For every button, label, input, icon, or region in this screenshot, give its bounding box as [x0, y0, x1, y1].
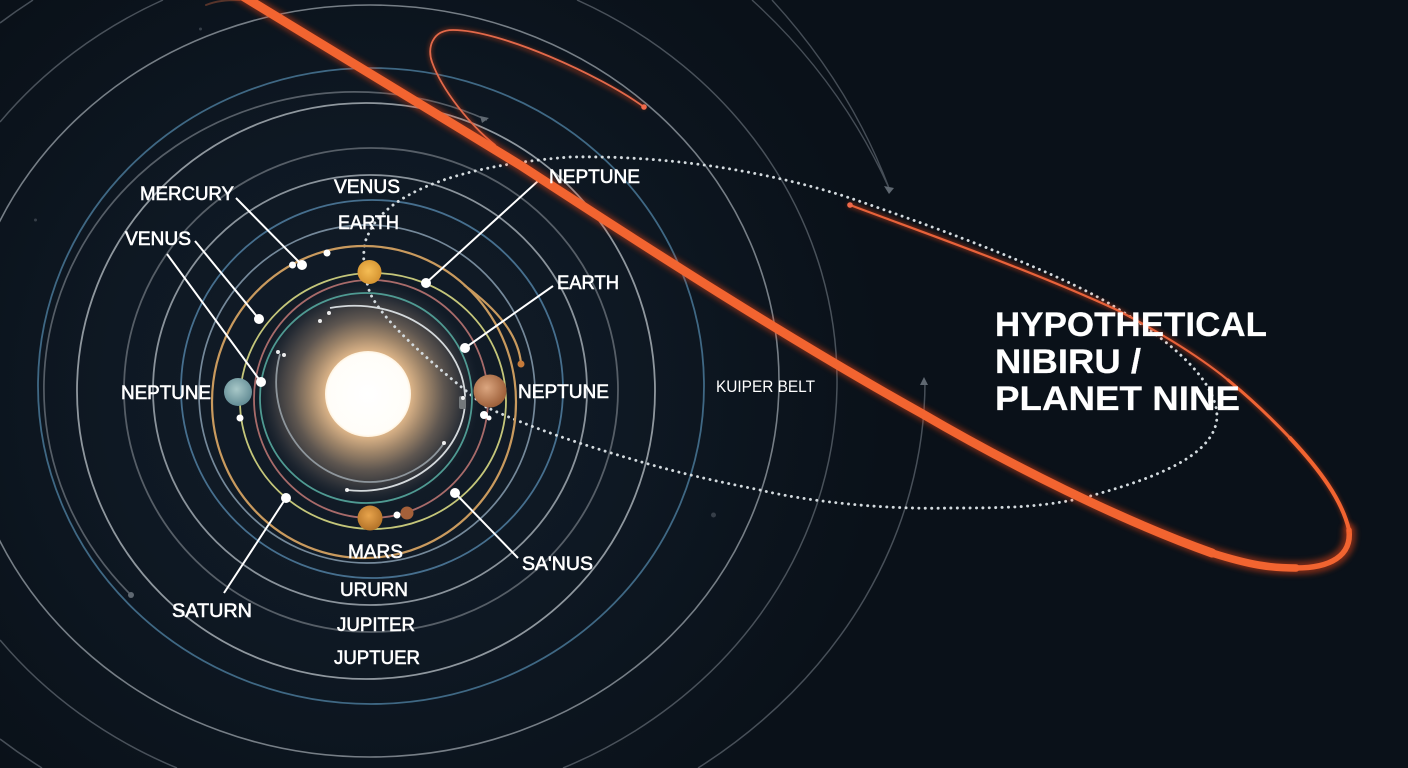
- planet: small orange: [518, 360, 524, 368]
- orange orbit: [212, 246, 521, 558]
- leader: saturn: [224, 498, 286, 593]
- yellow orbit: [240, 273, 506, 529]
- title line 2: NIBIRU /: [995, 343, 1142, 381]
- dotted orbit: [364, 157, 1217, 508]
- outer orbit rings: [0, 0, 925, 768]
- marker dots: [236, 250, 492, 519]
- nibiru orbit: [206, 0, 1349, 568]
- leader lines: [167, 181, 553, 593]
- arrowhead lower right: [920, 377, 928, 385]
- return segment glow: [850, 205, 1349, 530]
- small inner dots: [276, 311, 465, 492]
- small orbit line: [430, 30, 644, 145]
- leader: mercury: [236, 198, 302, 265]
- planets: [224, 260, 524, 530]
- ring 1: [199, 225, 535, 563]
- title line 1: HYPOTHETICAL: [995, 306, 1267, 344]
- label: earth right: EARTH: [557, 272, 619, 294]
- ring 6: [38, 68, 704, 704]
- return segment thin: [850, 205, 1228, 380]
- faint dots: [34, 28, 716, 518]
- faint tail at top edge: [206, 0, 240, 5]
- planet labels: [121, 166, 640, 669]
- label: saturn: SATURN: [172, 600, 252, 622]
- label: venus left: VENUS: [125, 228, 191, 250]
- grey marker: [459, 396, 466, 409]
- sun disc: [325, 351, 411, 437]
- thick segment: [236, 0, 1212, 553]
- label: jupiter: JUPITER: [337, 614, 415, 636]
- white inner arc: [330, 306, 465, 491]
- label: juptuer: JUPTUER: [334, 647, 420, 669]
- label: earth top: EARTH: [338, 212, 399, 234]
- red orbit: [254, 280, 488, 518]
- teal orbit: [260, 293, 472, 503]
- ring 2: [181, 200, 563, 578]
- label: kuiper belt: KUIPER BELT: [716, 377, 815, 396]
- leader: neptune: [426, 181, 538, 283]
- tapering segment near perihelion: [1212, 553, 1296, 568]
- leader: earth: [465, 286, 553, 348]
- small orbit end dot: [641, 104, 647, 110]
- small orbit glow: [430, 30, 644, 145]
- orbit glow: [236, 0, 1349, 568]
- ring 7: [0, 5, 779, 757]
- ring 5: [77, 103, 655, 679]
- upper right arc pair: [752, 0, 889, 188]
- sun: [256, 282, 480, 506]
- grey inner arc: [276, 354, 444, 482]
- return segment outer: [1290, 438, 1349, 530]
- planet: small brown: [400, 506, 414, 520]
- ring 8: [0, 0, 837, 768]
- return segment end dot: [847, 202, 853, 208]
- title line 3: PLANET NINE: [995, 380, 1240, 418]
- label: neptune left: NEPTUNE: [121, 382, 211, 404]
- leader: venus upper: [195, 241, 259, 319]
- title: [995, 306, 1267, 418]
- label: sanus: SA'NUS: [522, 553, 593, 575]
- ring 4: [124, 148, 618, 632]
- sun glow: [256, 282, 480, 506]
- planet: teal: [224, 378, 252, 406]
- debris dot: [128, 592, 134, 598]
- return segment middle: [1228, 380, 1290, 438]
- leader: sanus: [455, 493, 518, 558]
- ring 9: [0, 0, 925, 768]
- label: neptune top: NEPTUNE: [549, 166, 640, 188]
- small red orbit: [430, 30, 647, 145]
- tip segment: [1296, 530, 1349, 568]
- ring 3: [153, 175, 587, 605]
- planet: brown: [474, 374, 506, 408]
- arrowhead top: [480, 116, 489, 123]
- label: ururn: URURN: [340, 579, 408, 601]
- leader: venus lower: [167, 254, 261, 382]
- label: neptune right: NEPTUNE: [518, 381, 609, 403]
- label: mars: MARS: [348, 541, 403, 563]
- partial ring with end dot: [44, 92, 487, 595]
- planet: gold: [358, 260, 382, 284]
- arrowhead top right: [884, 186, 894, 194]
- faint arrowheads and debris: [34, 28, 928, 598]
- planet: amber: [358, 506, 382, 530]
- dot cluster: [236, 250, 492, 519]
- label: mercury: MERCURY: [140, 183, 234, 205]
- label: venus top: VENUS: [334, 176, 400, 198]
- inner planetary orbits: [212, 246, 521, 558]
